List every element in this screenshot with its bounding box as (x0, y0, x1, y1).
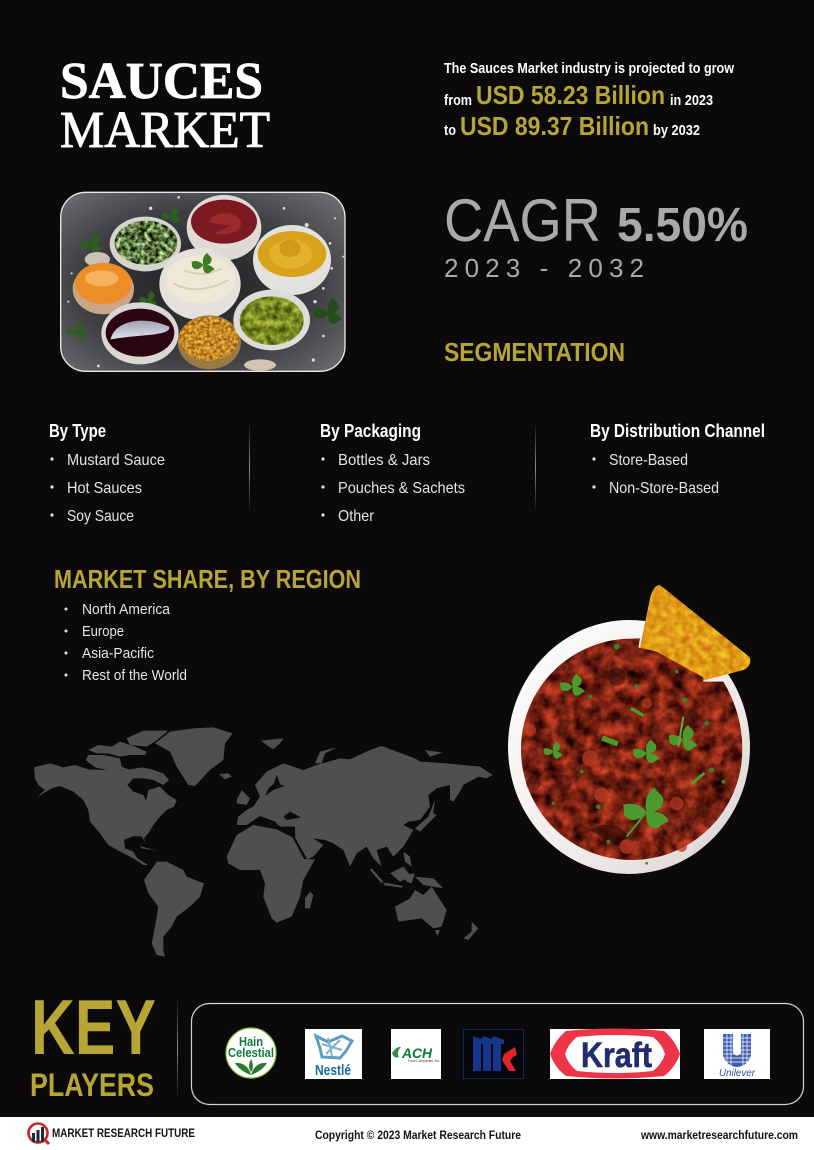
logo: Nestle (305, 1029, 362, 1079)
CAGR figure: 2023 - 2032 (444, 253, 644, 283)
segment: by type: Mustard Sauce (67, 452, 165, 469)
bowl: green relish (233, 290, 310, 350)
region list: Rest of the World (82, 667, 187, 684)
footer: Copyright © 2023 Market Research Future (315, 1128, 521, 1142)
bowl: yellow mustard (253, 225, 331, 295)
heading: market share by region: MARKET SHARE, BY REGION (54, 564, 361, 594)
logo: ACH: Food Companies, Inc. (408, 1059, 440, 1063)
segment: by packaging: By Packaging (320, 421, 421, 441)
market size summary: by 2032 (653, 123, 700, 139)
segment: by distribution channel: Store-Based (609, 452, 688, 469)
segment: by packaging: Pouches & Sachets (338, 480, 465, 497)
tortilla chip (640, 585, 750, 681)
region list: North America (82, 601, 171, 618)
photo: bowls of sauces (61, 192, 345, 371)
segment: by packaging (320, 421, 465, 525)
region list: Europe (82, 623, 124, 640)
logo: Hain Celestial: Hain (239, 1034, 263, 1049)
heading: segmentation: SEGMENTATION (444, 337, 625, 367)
market size summary: from (444, 93, 472, 109)
title (60, 53, 270, 159)
bowl (508, 620, 750, 874)
icon: market research future logo (28, 1124, 49, 1144)
market size summary: USD 89.37 Billion (460, 111, 649, 141)
key players panel (192, 1004, 804, 1104)
segment: by distribution channel (590, 421, 765, 497)
bowl: mustard seeds (178, 315, 241, 369)
world map (34, 727, 493, 957)
logo: Unilever: Unilever (719, 1068, 756, 1079)
icon: parsley and garlic garnish (67, 196, 344, 371)
salsa (521, 638, 742, 860)
logo: ACH (391, 1029, 441, 1079)
market size summary: USD 58.23 Billion (476, 80, 665, 110)
title: SAUCES (60, 53, 263, 110)
title: MARKET (60, 102, 270, 159)
segment: by packaging: Bottles & Jars (338, 452, 430, 469)
segment: by type: By Type (49, 421, 106, 441)
market size summary (444, 61, 735, 141)
key players heading: PLAYERS (30, 1067, 154, 1103)
cilantro garnish (543, 644, 725, 865)
logo: Kraft (550, 1028, 680, 1079)
logo: Hain Celestial (226, 1028, 276, 1078)
footer: MARKET RESEARCH FUTURE (52, 1126, 195, 1140)
bowl: ketchup (187, 195, 261, 260)
segment: by type: Soy Sauce (67, 508, 134, 525)
key players heading: KEY (31, 983, 156, 1071)
region list (64, 601, 187, 684)
bowl: green herb sauce (110, 217, 181, 271)
footer (0, 1117, 814, 1150)
key players heading (30, 983, 156, 1103)
market size summary: to (444, 123, 456, 139)
CAGR figure (444, 187, 748, 283)
CAGR figure: 5.50% (617, 199, 748, 252)
CAGR figure: CAGR (444, 187, 601, 254)
segment: by packaging: Other (338, 508, 375, 525)
region list: Asia-Pacific (82, 645, 154, 662)
segment: by distribution channel: By Distribution Channel (590, 421, 765, 441)
logo: McCormick (464, 1030, 524, 1078)
bowl: orange sauce (73, 263, 134, 314)
bowl: mayonnaise (159, 248, 241, 320)
segment: by distribution channel: Non-Store-Based (609, 480, 719, 497)
market size summary: The Sauces Market industry is projected to grow (444, 61, 735, 77)
logo: Hain Celestial: Celestial (228, 1045, 274, 1060)
logo: Kraft: Kraft (581, 1036, 652, 1075)
market size summary: in 2023 (670, 93, 713, 109)
photo: salsa bowl with tortilla chip (508, 585, 750, 874)
bowl: soy sauce (101, 302, 179, 364)
segment: by type: Hot Sauces (67, 480, 142, 497)
logo: Unilever (704, 1029, 770, 1079)
segment: by type (49, 421, 165, 525)
logo: Nestle: Nestlé (315, 1062, 351, 1079)
logo: ACH: ACH (401, 1045, 433, 1061)
